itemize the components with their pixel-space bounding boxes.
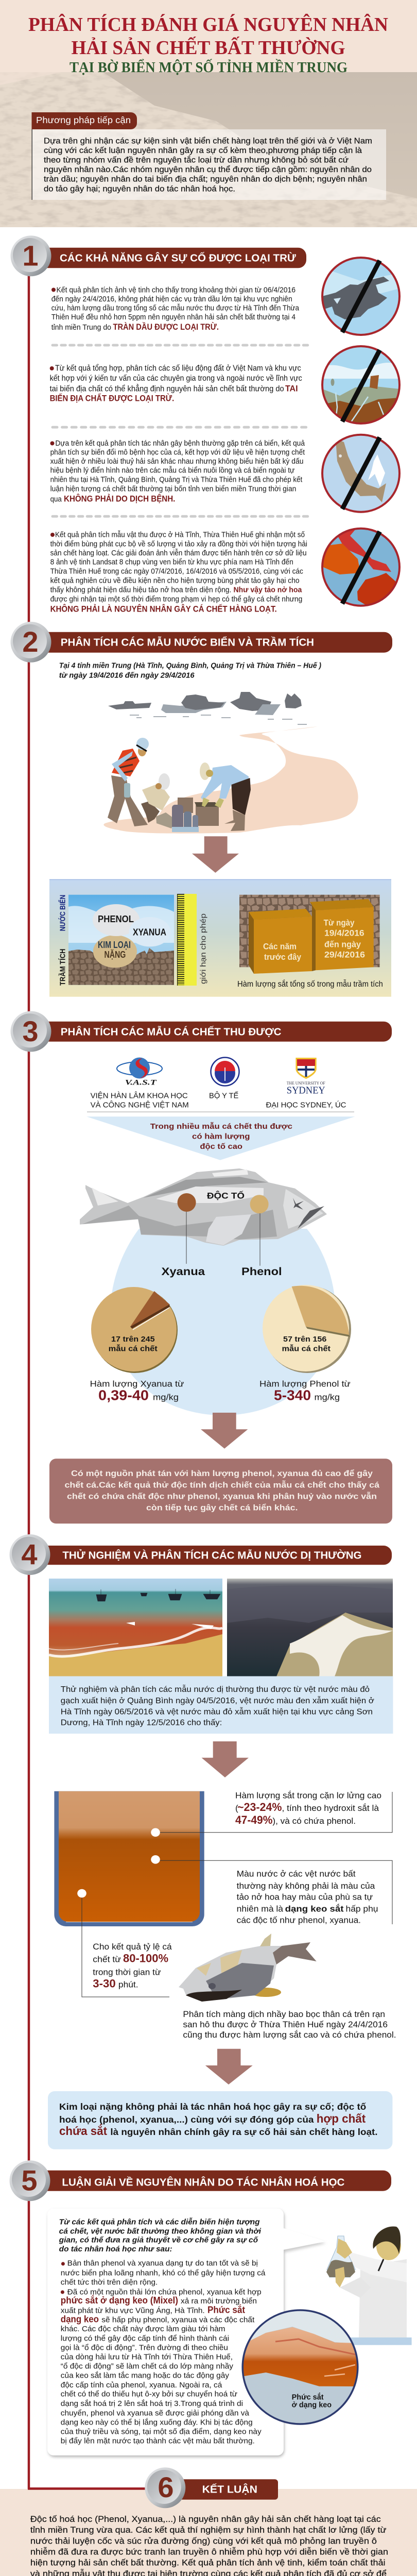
pie chart: phenol: 57 trên 156 [283, 1335, 326, 1344]
water test text panel: Hà Tĩnh ngày 06/5/2016 và vệt nước màu đỏ xẫm xuất hiện tại khu vực cảng Sơn [61, 1706, 373, 1716]
illustration: dead fish on coral [179, 1934, 317, 2002]
method tab [32, 112, 137, 129]
section 1 bar [44, 248, 306, 268]
hypothesis bullets: dạng keo này có thể bị lắng xuống đáy. Khi bị tác động [61, 2418, 253, 2427]
bubble labels: KIM LOẠI [98, 940, 131, 950]
text: oil spill excluded: TRÀN DẦU ĐƯỢC LOẠI TRỪ. [113, 322, 219, 332]
logo: University of Sydney: THE UNIVERSITY OF [287, 1081, 325, 1086]
hypothesis bullets: phức sắt ở dạng keo (Mixel) [61, 2295, 178, 2306]
text: iron in suspended sediment: ~23-24% [237, 1801, 282, 1814]
phenol concentration: Hàm lượng Phenol từ [259, 1379, 351, 1389]
institution names: ĐẠI HỌC SYDNEY, ÚC [266, 1100, 346, 1109]
section 1 badge: 1 [22, 239, 39, 272]
cyanide bubble [129, 917, 171, 946]
institution names [91, 1092, 346, 1109]
method text: cùng với các kết luận nguyên nhân gây ra sự cố kèm theo,phương pháp tiếp cận là [44, 146, 362, 155]
hypothesis intro: Từ các kết quả phân tích và các diễn biến hiện tượng [59, 2218, 260, 2227]
bar labels: 19/4/2016 [324, 928, 364, 938]
water test text panel: Thử nghiệm và phân tích các mẫu nước dị thường thu được từ vệt nước màu đỏ [61, 1684, 370, 1694]
text: disease excluded: KHÔNG PHẢI DO DỊCH BỆNH. [64, 494, 175, 503]
photo: red water on beach [49, 1579, 222, 1676]
illustration: scientist [326, 2227, 412, 2345]
text: disease excluded: phân tích sự biến đổi mô bệnh học của cá, kết hợp với dữ liệu về hiện tượng chết [50, 448, 305, 456]
panel: approach method [32, 112, 386, 200]
text: oil spill excluded: Thiên Huế đều nhỏ hơn 5ppm nên nguyên nhân hải sản chết bất thường tại 4 [51, 313, 296, 321]
section 6 heading: KẾT LUẬN [202, 2483, 257, 2495]
pie chart: xyanua [91, 1287, 178, 1373]
text: oil spill excluded: cứu, hàm lượng dầu trong tổng số các mẫu nước thu được từ Hà Tĩnh đến Thừa [51, 304, 300, 313]
logo: VAST: V.A.S.T [125, 1079, 157, 1087]
section 4 badge [9, 1534, 50, 1575]
conclusion text: nhiễm đã đưa ra được bức tranh lan truyền ô nhiễm phù hợp với diễn biến về thời gian [30, 2547, 388, 2556]
conclusion box: section 3: Có một nguồn phát tán với hàm lượng phenol, xyanua đủ cao để gây [71, 1469, 373, 1478]
text: mucus analysis: san hô thu được ở Thừa Thiên Huế ngày 24/4/2016 [183, 2020, 388, 2029]
conclusion box: section 4 [48, 2091, 392, 2149]
section 4 heading: THỬ NGHIỆM VÀ PHÂN TÍCH CÁC MẪU NƯỚC DỊ THƯỜNG [62, 1549, 361, 1562]
text: algal bloom excluded: 8 ảnh vệ tinh Landsat 8 chụp vùng ven biển từ khu vực phía nam Hà Tĩnh đến [50, 558, 293, 567]
hypothesis bullets: của thuỷ triều và sóng, tại một số địa điểm, dạng keo này [61, 2427, 262, 2436]
illustration: sample boxes and bottles [156, 798, 219, 832]
text: water colour: thường này không phải là màu của [237, 1881, 375, 1891]
heavy metals bubble [93, 935, 137, 968]
phenol concentration: mg/kg [314, 1392, 340, 1402]
section 3 bar [44, 1022, 392, 1042]
method text: do tảo gây hại; nguyên nhân do tác nhân hoá học. [44, 184, 235, 193]
xyanua concentration: Hàm lượng Xyanua từ [90, 1379, 184, 1389]
text: disease excluded: xuất hiện ở nhiều loài thuỷ hải sản khác nhau nhưng không biểu hiện bất kỳ dấu [50, 457, 303, 466]
hypothesis bullets: sẽ hấp phụ phenol, xyanua và các độc chất [101, 2315, 255, 2324]
text: algal bloom excluded: Như vậy tảo nở hoa [234, 585, 302, 594]
ruler: permitted limit: giới hạn cho phép [199, 913, 208, 984]
conclusion text: hiện tượng hải sản chết bất thường. Kết quả phân tích ảnh vệ tinh, kiểm toán chất thải [30, 2557, 385, 2567]
hypothesis bullets: bị đẩy lên mặt nước tạo thành các vệt màu bất thường. [61, 2437, 255, 2446]
section 4 bar [44, 1546, 392, 1565]
vertical label seawater: NƯỚC BIỂN [58, 895, 67, 931]
icon: algae map crossed out [322, 529, 399, 608]
water test text panel: gạch xuất hiện ở Quảng Bình ngày 04/5/2016, vệt nước màu đen xẫm xuất hiện ở [61, 1696, 374, 1705]
text: disease excluded: qua [50, 495, 62, 503]
text: fish mortality [93, 1942, 172, 1990]
conclusion box: section 4: hợp chất [317, 2112, 366, 2125]
conclusion box: section 3: chết có chứa chất độc như phenol, xyanua khi phân huỷ vào nước vẫn [67, 1491, 377, 1501]
iron bar comparison [237, 895, 383, 989]
text: iron in suspended sediment: ), và có chứa phenol. [272, 1816, 356, 1826]
section 5 badge: 5 [21, 2164, 38, 2197]
text: fish mortality: phút. [118, 1979, 138, 1989]
hypothesis bullets: dạng sắt hoá trị 2 lên sắt hoá trị 3.Trong quá trình di [61, 2399, 243, 2408]
icon: geology crossed out [322, 346, 399, 425]
hypothesis intro: cá chết, vệt nước bất thường theo không gian và thời [59, 2227, 262, 2235]
text: geological hazard excluded: kết hợp với ý kiến tư vấn của các chuyên gia trong và ngoài nước về lĩnh vực [50, 374, 302, 383]
method tab label: Phương pháp tiếp cận [36, 115, 131, 125]
conclusion box: section 4: Kim loại nặng không phải là tác nhân hoá học gây ra sự cố; độc tố [59, 2102, 367, 2112]
title: TẠI BỜ BIỂN MỘT SỐ TỈNH MIỀN TRUNG [70, 59, 348, 76]
text: algal bloom excluded: Thừa Thiên Huế trong các ngày 07/4/2016, 16/4/2016 và 05/5/2016, cùng với các [50, 567, 303, 575]
bar labels: Các năm [263, 942, 297, 952]
conclusion box: section 3 [49, 1459, 392, 1523]
text: algal bloom excluded: KHÔNG PHẢI LÀ NGUYÊN NHÂN GÂY CÁ CHẾT HÀNG LOẠT. [50, 604, 277, 614]
institution names: VÀ CÔNG NGHỆ VIỆT NAM [91, 1100, 189, 1109]
text: fish mortality: chết từ [93, 1954, 121, 1964]
phenol marker [250, 1195, 269, 1213]
arrow [202, 1741, 249, 1777]
phenol concentration [259, 1379, 351, 1403]
text: water colour: hấp phụ [346, 1904, 378, 1914]
section 6 badge [145, 2467, 185, 2508]
hypothesis bullets: xuất phát từ khu vực Vũng Áng, Hà Tĩnh. [61, 2306, 205, 2315]
text: iron in suspended sediment: Hàm lượng sắt trong cặn lơ lửng cao [235, 1791, 381, 1801]
xyanua concentration [90, 1379, 184, 1403]
section 4 badge: 4 [21, 1538, 38, 1570]
magnified colloid circle [241, 2310, 359, 2424]
water test text panel: Dương, Hà Tĩnh ngày 12/5/2016 cho thấy: [61, 1719, 222, 1727]
icon: sick fish crossed out [322, 435, 399, 512]
section 5 heading: LUẬN GIẢI VỀ NGUYÊN NHÂN DO TÁC NHÂN HOÁ HỌC [62, 2176, 344, 2189]
toxin label: ĐỘC TỐ [207, 1191, 245, 1201]
hypothesis bullets: chết có thể do thiếu hụt ô-xy bởi sự chuyển hoá từ [61, 2390, 237, 2399]
section 2 badge [10, 622, 51, 663]
text: geological hazard excluded [50, 363, 302, 403]
xyanua marker [178, 1193, 196, 1212]
arrow [201, 1413, 248, 1449]
hypothesis bullets: Đã có một nguồn thải lớn chứa phenol, xyanua kết hợp [67, 2287, 262, 2296]
sampling note [59, 662, 321, 680]
hypothesis bullets: của keo sắt làm tắc mang hoặc do tác động gây [61, 2371, 230, 2380]
hypothesis bullets: chuyển, phenol và xyanua sẽ được giải phóng dần và [61, 2409, 250, 2417]
text: algal bloom excluded: sản chết hàng loạt. Các giải đoán ảnh viễn thám được tiến hành trên cơ sở dữ liệu [50, 549, 307, 557]
text: disease excluded: luận hiện tượng cá chết bất thường tại bốn tỉnh ven biển miền Trung thời gian [50, 484, 296, 493]
text: water colour: nhiên mà là [237, 1904, 284, 1914]
text: disease excluded: Dựa trên kết quả phân tích tác nhân gây bệnh thường gặp trên cá biển, kết quả [55, 439, 305, 448]
bar labels: đến ngày [324, 939, 361, 949]
text: fish mortality: trong thời gian từ [93, 1967, 161, 1977]
section 1 heading: CÁC KHẢ NĂNG GÂY SỰ CỐ ĐƯỢC LOẠI TRỪ [60, 252, 296, 264]
conclusion box: section 3: còn tiếp tục gây chết cá biển khác. [146, 1503, 298, 1513]
hypothesis bullets: Phức sắt [207, 2304, 245, 2315]
illustration: boats [108, 692, 307, 725]
ruler: permitted limit [177, 894, 208, 986]
bubble labels: NẶNG [104, 949, 126, 960]
bar labels: Từ ngày [324, 918, 355, 928]
hypothesis bullets: của dòng hải lưu từ Hà Tĩnh tới Thừa Thiên Huế, [61, 2352, 233, 2361]
colloid label: Phức sắt [292, 2392, 324, 2401]
hypothesis bullets: độc cấp tính của phenol, xyanua. Ngoài ra, cá [61, 2381, 222, 2389]
logo: University of Sydney: SYDNEY [287, 1085, 325, 1096]
photo: dark water [227, 1579, 393, 1676]
text: water colour: dạng keo sắt [285, 1904, 344, 1914]
callout triangle: độc tố cao [200, 1142, 242, 1151]
institution names: BỘ Y TẾ [209, 1092, 238, 1100]
title: PHÂN TÍCH ĐÁNH GIÁ NGUYÊN NHÂN [28, 14, 388, 36]
toxin names: Phenol [241, 1266, 282, 1278]
text: water colour: Màu nước ở các vệt nước bất [237, 1869, 356, 1879]
section 3 badge [10, 1011, 51, 1052]
sampling note: từ ngày 19/4/2016 đến ngày 29/4/2016 [59, 671, 195, 680]
method text: Dựa trên ghi nhận các sự kiện sinh vật biển chết hàng loạt trên thế giới và ở Việt Nam [44, 136, 372, 145]
bubble labels: XYANUA [133, 927, 166, 938]
hypothesis bullets: nước biển pha loãng nhanh, khó có thể gây hiện tượng cá [61, 2269, 266, 2278]
text: geological hazard excluded: TAI [285, 383, 298, 393]
divider [53, 515, 308, 518]
seawater and sediment diagram [58, 895, 174, 986]
illustration: crouching worker [141, 773, 170, 823]
text: disease excluded: hiệu bệnh lý điển hình nào trên các mẫu cá biển nuôi lồng và cá biển ngoài tự [50, 466, 294, 475]
conclusion box: section 4: là nguyên nhân chính gây ra sự cố hải sản chết hàng loạt. [110, 2127, 377, 2137]
iron bar caption: Hàm lượng sắt tổng số trong mẫu trầm tích [237, 980, 383, 989]
section 1 header [10, 235, 306, 276]
callout lines [82, 1792, 392, 1997]
text: algal bloom excluded: kết quả nghiên cứu về điều kiện nền cho hiện tượng bùng phát tảo gây hại cho [50, 576, 300, 585]
conclusion box: section 4: hoá học (phenol, xyanua,...) cùng với sự đóng góp của [59, 2114, 314, 2125]
text: iron in suspended sediment: , tính theo hydroxit sắt là [282, 1803, 379, 1813]
text: iron in suspended sediment: 47-49% [235, 1814, 272, 1826]
callout triangle: Trong nhiều mẫu cá chết thu được [150, 1122, 292, 1131]
icon: oil spill crossed out [322, 258, 399, 335]
bar labels: 29/4/2016 [324, 950, 365, 959]
text: algal bloom excluded [50, 531, 307, 614]
speech bubble [47, 2209, 326, 2457]
hypothesis bullets: Bản thân phenol và xyanua dạng tự do tan tốt và sẽ bị [67, 2259, 258, 2268]
text: disease excluded [50, 439, 305, 503]
bubble labels: PHENOL [98, 914, 134, 924]
hypothesis bullets: gọi là “ổ độc di động”. Trên đường đi theo chiều [61, 2343, 228, 2352]
illustration: sand patch [103, 726, 358, 834]
conclusion box: section 4: chứa sắt [59, 2124, 107, 2138]
logo: University of Sydney [287, 1058, 325, 1096]
logo: Ministry of Health [211, 1057, 239, 1086]
blue egg background [110, 1229, 336, 1415]
section 5 badge [9, 2160, 50, 2201]
timeline line [29, 268, 149, 2488]
text: iron in suspended sediment: ( [235, 1803, 238, 1813]
section 2 bar [44, 632, 392, 653]
hypothesis bullets: lượng có thể gây độc cấp tính để hình thành cái [61, 2334, 229, 2343]
title: HẢI SẢN CHẾT BẤT THƯỜNG [71, 37, 345, 59]
hypothesis intro: gian, có thể đưa ra giả thuyết về cơ chế gây ra sự cố [59, 2236, 258, 2245]
text: algal bloom excluded: được ghi nhận tại một số thời điểm trong phạm vi hẹp có thể gây cá chết nhưng [50, 595, 302, 603]
bar labels: trước đây [264, 952, 301, 962]
text: oil spill excluded: Kết quả phân tích ảnh vệ tinh cho thấy trong khoảng thời gian từ 06/4/2016 [57, 285, 296, 294]
conclusion box: section 3: chết cá.Các kết quả thử độc tính dịch chiết của mẫu cá chết cho thấy cá [65, 1480, 379, 1489]
text: algal bloom excluded: thời điểm bùng phát cục bộ về số lượng vi tảo xảy ra đồng thời với hiện tượng hải [50, 539, 307, 548]
text: mucus analysis [183, 2009, 396, 2040]
method text: theo từng nhóm vấn đề trên nguyên tắc loại trừ dần nhưng không bỏ sót bất cứ [44, 155, 349, 164]
beaker marker dots [77, 1828, 160, 1897]
conclusion text: tỉnh miền Trung vừa qua. Các kết quả thí nghiệm sự hình thành hạt chất lơ lửng (lấy từ [30, 2525, 386, 2535]
arrow [205, 2049, 253, 2084]
text: fish mortality: Cho kết quả tỷ lệ cá [93, 1942, 172, 1952]
section 4 header [9, 1534, 392, 1575]
hypothesis bullets: “ổ độc di động” sẽ làm chết cá do lớp màng nhầy [61, 2362, 234, 2370]
section 2 heading: PHÂN TÍCH CÁC MẪU NƯỚC BIỂN VÀ TRẦM TÍCH [61, 636, 314, 648]
institution names: VIỆN HÀN LÂM KHOA HỌC [91, 1092, 188, 1100]
conclusion text [30, 2514, 391, 2576]
magnified colloid circle: ở dạng keo [292, 2401, 332, 2410]
callout triangle [86, 1116, 355, 1160]
text: mucus analysis: Phân tích màng dịch nhầy bao bọc thân cá trên rạn [183, 2009, 385, 2019]
section 1 badge [10, 235, 51, 276]
section 5 bar [44, 2171, 391, 2191]
text: algal bloom excluded: Kết quả phân tích mẫu vật thu được ở Hà Tĩnh, Thừa Thiên Huế ghi nhận một số [55, 531, 305, 539]
illustration: bending worker [200, 762, 251, 831]
section 3 heading: PHÂN TÍCH CÁC MẪU CÁ CHẾT THU ĐƯỢC [61, 1025, 282, 1038]
text: geological hazard excluded: tai biến địa chất có thể khẳng định nguyên hải sản chết bất thường do [50, 383, 284, 393]
pie chart: phenol [263, 1285, 351, 1373]
hypothesis bullets: xả ra môi trường biển [181, 2297, 257, 2306]
bubble labels [98, 914, 166, 960]
vertical label sediment: TRẦM TÍCH [59, 949, 67, 986]
text: mucus analysis: cũng thu được hàm lượng sắt cao và có chứa phenol. [183, 2030, 396, 2040]
section 6 redraw line end [28, 2487, 149, 2490]
conclusion text: nước thải luyện cốc và súc rửa đường ống) cùng với kết quả mô phỏng lan truyền ô [30, 2536, 377, 2546]
arrow [192, 836, 239, 873]
xyanua concentration: mg/kg [153, 1392, 179, 1402]
text: algal bloom excluded: thấy không phát hiện dấu hiệu tảo nở hoa trên diện rộng. [50, 585, 231, 594]
hypothesis intro: do tác nhân hoá học như sau: [59, 2245, 172, 2253]
text: oil spill excluded: tỉnh miền Trung do [51, 323, 111, 332]
text: fish mortality: 80-100% [123, 1952, 168, 1964]
text: geological hazard excluded: Từ kết quả tổng hợp, phân tích các số liệu động đất ở Việt Nam và khu vực [55, 363, 301, 372]
hypothesis intro [59, 2218, 262, 2253]
phenol bubble [93, 904, 140, 936]
text: water colour [237, 1869, 378, 1925]
divider [53, 426, 308, 429]
text: oil spill excluded: đến ngày 24/4/2016, không phát hiện các vụ tràn dầu lớn tại khu vực nghiên [51, 295, 292, 303]
text: disease excluded: nhiên thu tại Hà Tĩnh, Quảng Bình, Quảng Trị và Thừa Thiên Huế đã cho phép kết [50, 475, 303, 484]
lab bench [349, 2337, 412, 2345]
text: water colour: tảo nở hoa hay màu của phù sa tự [237, 1892, 373, 1902]
method text: nguyên nhân nào.Các nhóm nguyên nhân cụ thể được tiếp cận gồm: nguyên nhân do [44, 165, 372, 174]
section 3 badge: 3 [22, 1015, 39, 1047]
text: fish mortality: 3-30 [93, 1977, 116, 1990]
callout triangle: có hàm lượng [192, 1132, 250, 1141]
section 6 header [145, 2467, 278, 2508]
conclusion background [0, 2489, 417, 2576]
phenol concentration: 5-340 [274, 1387, 311, 1403]
hypothesis bullets: chết tức thời trên diện rộng. [61, 2278, 158, 2286]
section 6 bar [170, 2479, 278, 2500]
title [28, 14, 388, 76]
hypothesis bullets [61, 2259, 266, 2446]
xyanua concentration: 0,39-40 [98, 1387, 149, 1403]
toxin names [162, 1266, 282, 1278]
text: iron in suspended sediment [235, 1791, 381, 1826]
hypothesis bullets: khác. Các độc chất này được làm giàu tới hàm [61, 2325, 225, 2333]
diagram: water beaker [54, 1791, 204, 1926]
pie chart: xyanua: 17 trên 245 [111, 1335, 155, 1344]
panel: sample results [49, 879, 391, 997]
header background [0, 0, 417, 227]
illustration: worker with vest [108, 738, 149, 826]
text: water colour: các độc tố như phenol, xyanua. [237, 1916, 361, 1925]
conclusion text: Độc tố hoá học (Phenol, Xyanua,...) là nguyên nhân gây hải sản chết hàng loạt tại các [30, 2514, 381, 2524]
water test text panel [49, 1676, 393, 1734]
section 6 badge: 6 [158, 2471, 174, 2503]
pie chart: xyanua: mẫu cá chết [109, 1344, 158, 1353]
method text: tràn dầu; nguyên nhân do tai biến địa chất; nguyên nhân do dịch bệnh; nguyên nhân [44, 175, 367, 184]
section 3 header [10, 1011, 392, 1052]
section 5 header [9, 2160, 391, 2201]
text: geological hazard excluded: BIẾN ĐỊA CHẤT ĐƯỢC LOẠI TRỪ. [50, 393, 174, 403]
section 2 badge: 2 [22, 625, 39, 658]
section 2 header [10, 622, 392, 663]
pie chart: phenol: mẫu cá chết [282, 1344, 331, 1353]
method text [44, 136, 372, 193]
text: oil spill excluded [51, 285, 300, 332]
divider [53, 344, 308, 346]
illustration: dead fish with toxins [80, 1168, 327, 1246]
toxin names: Xyanua [162, 1266, 205, 1278]
sampling note: Tại 4 tỉnh miền Trung (Hà Tĩnh, Quảng Bình, Quảng Trị và Thừa Thiên – Huế ) [59, 662, 321, 670]
logo: VAST [117, 1057, 162, 1087]
hypothesis bullets: dạng keo [61, 2314, 99, 2324]
bar labels [263, 918, 365, 962]
